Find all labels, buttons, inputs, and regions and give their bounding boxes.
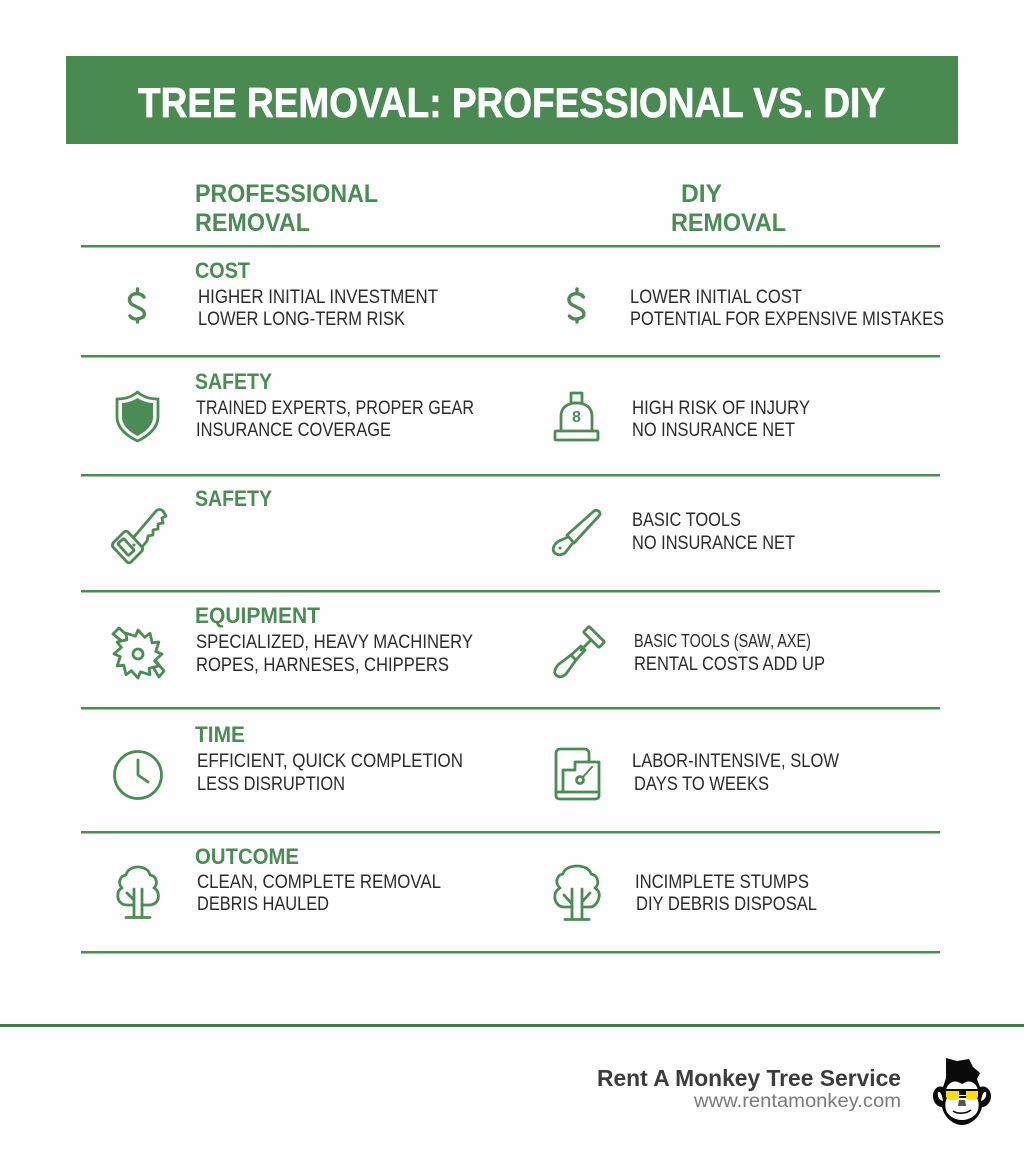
text: professional cost: HIGHER INITIAL INVESTMENT — [198, 286, 438, 308]
column heading: DIY removal: REMOVAL — [671, 209, 786, 237]
icon: hand saw — [112, 510, 166, 563]
text: professional outcome: CLEAN, COMPLETE REMOVAL — [197, 871, 441, 893]
text: professional equipment — [196, 631, 473, 676]
icon: circular saw blade — [113, 628, 164, 678]
row: time — [114, 722, 839, 799]
text: DIY equipment — [634, 631, 825, 675]
text: DIY cost: LOWER INITIAL COST — [630, 286, 802, 308]
text: professional time — [197, 750, 463, 795]
icon: tree DIY — [555, 866, 599, 920]
row: tools — [112, 486, 795, 563]
text: DIY outcome: DIY DEBRIS DISPOSAL — [636, 893, 817, 915]
heading: equipment: EQUIPMENT — [195, 603, 321, 628]
column heading: DIY removal: DIY — [681, 180, 722, 208]
text: DIY time: LABOR-INTENSIVE, SLOW — [632, 750, 839, 772]
text: DIY equipment: BASIC TOOLS (SAW, AXE) — [634, 631, 811, 651]
row: cost — [129, 258, 944, 330]
company name: Rent A Monkey Tree Service — [597, 1065, 901, 1091]
website: www.rentamonkey.com — [693, 1091, 901, 1112]
icon: clock — [114, 752, 162, 798]
title banner — [66, 56, 958, 144]
text: DIY cost — [630, 286, 944, 330]
icon: hammer tool — [555, 626, 605, 677]
text: DIY time — [632, 750, 839, 795]
icon: shield — [117, 392, 158, 441]
text: professional equipment: SPECIALIZED, HEAVY MACHINERY — [196, 631, 473, 653]
text: DIY safety: HIGH RISK OF INJURY — [632, 397, 810, 419]
column heading: professional removal: REMOVAL — [195, 209, 310, 237]
text: professional time: LESS DISRUPTION — [197, 773, 345, 795]
heading: cost: COST — [195, 258, 250, 283]
text: DIY outcome: INCIMPLETE STUMPS — [635, 871, 809, 893]
text: DIY equipment: RENTAL COSTS ADD UP — [634, 653, 825, 675]
text: DIY safety — [632, 397, 810, 441]
row: safety — [117, 369, 810, 441]
text: DIY outcome — [635, 871, 817, 915]
text: professional safety — [196, 397, 474, 441]
heading: outcome: OUTCOME — [195, 844, 299, 869]
icon: monkey logo — [933, 1058, 991, 1125]
text: professional safety: TRAINED EXPERTS, PROPER GEAR — [196, 397, 474, 419]
row: outcome — [118, 844, 817, 920]
icon: document with wrench — [556, 749, 599, 799]
icon: chisel — [553, 510, 600, 555]
row: equipment — [113, 603, 825, 678]
text: professional time: EFFICIENT, QUICK COMPLETION — [197, 750, 463, 772]
text: DIY tools: NO INSURANCE NET — [632, 532, 795, 554]
text: DIY time: DAYS TO WEEKS — [634, 773, 769, 795]
footer — [0, 1024, 1024, 1125]
column heading: professional removal — [195, 180, 378, 237]
icon: tree professional — [118, 867, 158, 918]
text: professional safety: INSURANCE COVERAGE — [196, 419, 391, 441]
text: DIY cost: POTENTIAL FOR EXPENSIVE MISTAKES — [630, 308, 944, 330]
text: professional outcome — [197, 871, 441, 915]
text: professional cost: LOWER LONG-TERM RISK — [198, 308, 405, 330]
column heading: professional removal: PROFESSIONAL — [195, 180, 378, 208]
column heading: DIY removal — [671, 180, 786, 237]
text: professional equipment: ROPES, HARNESES, CHIPPERS — [196, 654, 449, 676]
text: DIY safety: NO INSURANCE NET — [632, 419, 795, 441]
heading: safety: SAFETY — [195, 369, 272, 394]
icon: money bell — [555, 393, 598, 440]
text: professional outcome: DEBRIS HAULED — [197, 893, 329, 915]
heading: time: TIME — [195, 722, 245, 747]
icon: dollar sign professional — [129, 289, 144, 322]
heading: safety repeat: SAFETY — [195, 486, 272, 511]
title banner: TREE REMOVAL: PROFESSIONAL VS. DIY — [138, 79, 885, 126]
icon: money bell: 8 — [572, 409, 581, 426]
text: professional cost — [198, 286, 438, 330]
icon: dollar sign DIY — [569, 289, 584, 322]
text: DIY tools — [632, 509, 795, 554]
text: DIY tools: BASIC TOOLS — [632, 509, 741, 531]
